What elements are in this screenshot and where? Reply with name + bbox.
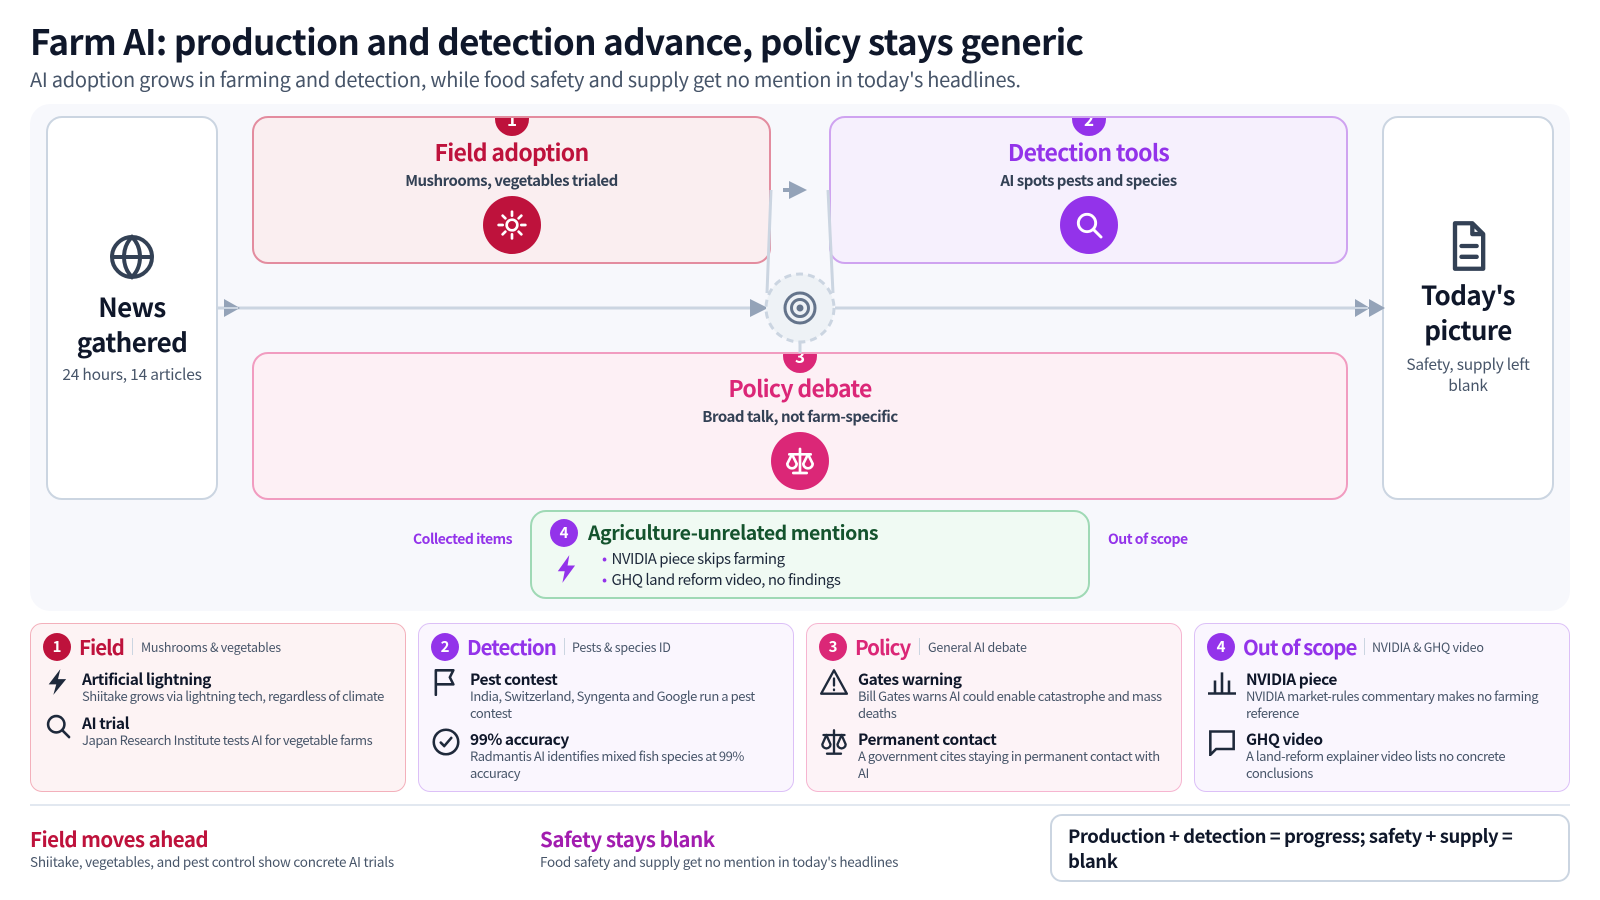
icon: globe (110, 234, 154, 280)
label: collected items: Collected items (413, 529, 512, 549)
text: news count: 24 hours, 14 articles (62, 363, 202, 385)
title: Farm AI: production and detection advance, policy stays generic (30, 15, 1083, 66)
icon: flag (434, 669, 455, 696)
list: mentions: • GHQ land reform video, no findings (602, 569, 840, 590)
icon: bar chart (1208, 672, 1236, 695)
item desc (470, 686, 755, 722)
text: todays picture (1406, 353, 1530, 396)
icon: bolt (48, 669, 66, 695)
badge 4: 4 (560, 522, 568, 543)
icon: scale (771, 432, 829, 490)
panel: field card (30, 623, 406, 792)
item title: Pest contest (470, 668, 557, 690)
takeaway text: Shiitake, vegetables, and pest control show concrete AI trials (30, 851, 394, 871)
item desc (858, 686, 1162, 722)
item desc: Bill Gates warns AI could enable catastrophe and mass (858, 686, 1162, 705)
tag: detection: Pests & species ID (572, 637, 671, 656)
list: mentions (602, 548, 840, 590)
item desc: AI (858, 763, 869, 782)
heading: agriculture-unrelated: Agriculture-unrelated mentions (588, 517, 878, 546)
text: policy debate: Broad talk, not farm-specific (702, 406, 898, 427)
icon: speech bubble (1209, 730, 1235, 756)
icon: search (46, 714, 70, 738)
heading: detection tools: Detection tools (1008, 134, 1169, 168)
badge 1 (495, 102, 529, 136)
panel: detection card (418, 623, 794, 792)
heading: todays picture (1421, 276, 1515, 348)
icon: sun (483, 196, 541, 254)
label: out of scope: Out of scope (1108, 529, 1188, 549)
item title: Artificial lightning (82, 668, 211, 690)
badge 2 (431, 633, 459, 661)
icon: lightning (558, 555, 575, 583)
item desc: NVIDIA market-rules commentary makes no farming (1246, 686, 1538, 705)
item title: 99% accuracy (470, 728, 569, 750)
icon: search (1060, 196, 1118, 254)
heading: policy debate: Policy debate (728, 370, 872, 404)
badge 1 (43, 633, 71, 661)
takeaway: field moves ahead (30, 823, 394, 871)
panel: detection tools (829, 116, 1348, 264)
item desc: accuracy (470, 763, 520, 782)
heading: news gathered: News (98, 288, 166, 325)
panel: policy card (806, 623, 1182, 792)
panel: todays picture (1382, 116, 1554, 500)
item title: Permanent contact (858, 728, 996, 750)
list: mentions: • NVIDIA piece skips farming (602, 548, 785, 569)
item desc: conclusions (1246, 763, 1313, 782)
item desc: contest (470, 703, 512, 722)
subtitle: AI adoption grows in farming and detection, while food safety and supply get no mention in today's headlines. (30, 64, 1021, 93)
item desc: deaths (858, 703, 896, 722)
item desc: reference (1246, 703, 1299, 722)
heading: detection: Detection (467, 631, 556, 661)
text: field adoption: Mushrooms, vegetables trialed (405, 170, 618, 191)
callout: conclusion: Production + detection = progress; safety + supply = (1068, 823, 1512, 849)
takeaway: safety stays blank (540, 823, 898, 871)
tag: out of scope: NVIDIA & GHQ video (1372, 637, 1484, 656)
takeaway text: Food safety and supply get no mention in today's headlines (540, 851, 898, 871)
heading: out of scope: Out of scope (1243, 631, 1356, 661)
icon: document (1452, 221, 1486, 271)
heading: news gathered (77, 288, 187, 360)
item desc: India, Switzerland, Syngenta and Google run a pest (470, 686, 755, 705)
item desc: A land-reform explainer video lists no concrete (1246, 746, 1505, 765)
item desc: A government cites staying in permanent contact with (858, 746, 1160, 765)
text: detection tools: AI spots pests and species (1000, 170, 1177, 191)
badge 4 (550, 519, 578, 547)
panel: policy debate (252, 352, 1348, 500)
heading: news gathered: gathered (77, 323, 187, 360)
heading: field: Field (79, 631, 124, 661)
item desc: Shiitake grows via lightning tech, regardless of climate (82, 686, 384, 705)
item desc: Japan Research Institute tests AI for vegetable farms (82, 730, 372, 749)
item title: AI trial (82, 712, 129, 734)
heading: policy: Policy (855, 631, 910, 661)
takeaway heading: Safety stays blank (540, 823, 715, 853)
callout: conclusion: blank (1068, 848, 1117, 874)
icon: check circle (432, 728, 460, 756)
badge 3 (783, 339, 817, 373)
panel: news gathered (46, 116, 218, 500)
heading: field adoption: Field adoption (434, 134, 589, 168)
tag: policy: General AI debate (928, 637, 1027, 656)
item title: GHQ video (1246, 728, 1323, 750)
item desc (1246, 746, 1505, 782)
badge 2 (1072, 102, 1106, 136)
item desc: Radmantis AI identifies mixed fish species at 99% (470, 746, 744, 765)
takeaway heading: Field moves ahead (30, 823, 208, 853)
item title: NVIDIA piece (1246, 668, 1337, 690)
item desc (1246, 686, 1538, 722)
icon: warning (820, 669, 848, 695)
panel: field adoption (252, 116, 771, 264)
item desc (470, 746, 744, 782)
heading: todays picture: picture (1424, 311, 1512, 348)
panel: out of scope card (1194, 623, 1570, 792)
panel: flow diagram (30, 104, 1570, 611)
heading: todays picture: Today's (1421, 276, 1515, 313)
item title: Gates warning (858, 668, 962, 690)
text: todays picture: blank (1448, 374, 1488, 396)
badge 3: 3 (829, 636, 837, 657)
badge 4 (1207, 633, 1235, 661)
icon: scale (821, 729, 847, 755)
badge 2: 2 (441, 636, 449, 657)
panel: agriculture-unrelated (530, 510, 1090, 599)
badge 4: 4 (1217, 636, 1225, 657)
callout: conclusion (1050, 814, 1570, 882)
item desc (858, 746, 1160, 782)
text: todays picture: Safety, supply left (1406, 353, 1530, 375)
badge 1: 1 (53, 636, 61, 657)
tag: field: Mushrooms & vegetables (141, 637, 281, 656)
badge 3 (819, 633, 847, 661)
